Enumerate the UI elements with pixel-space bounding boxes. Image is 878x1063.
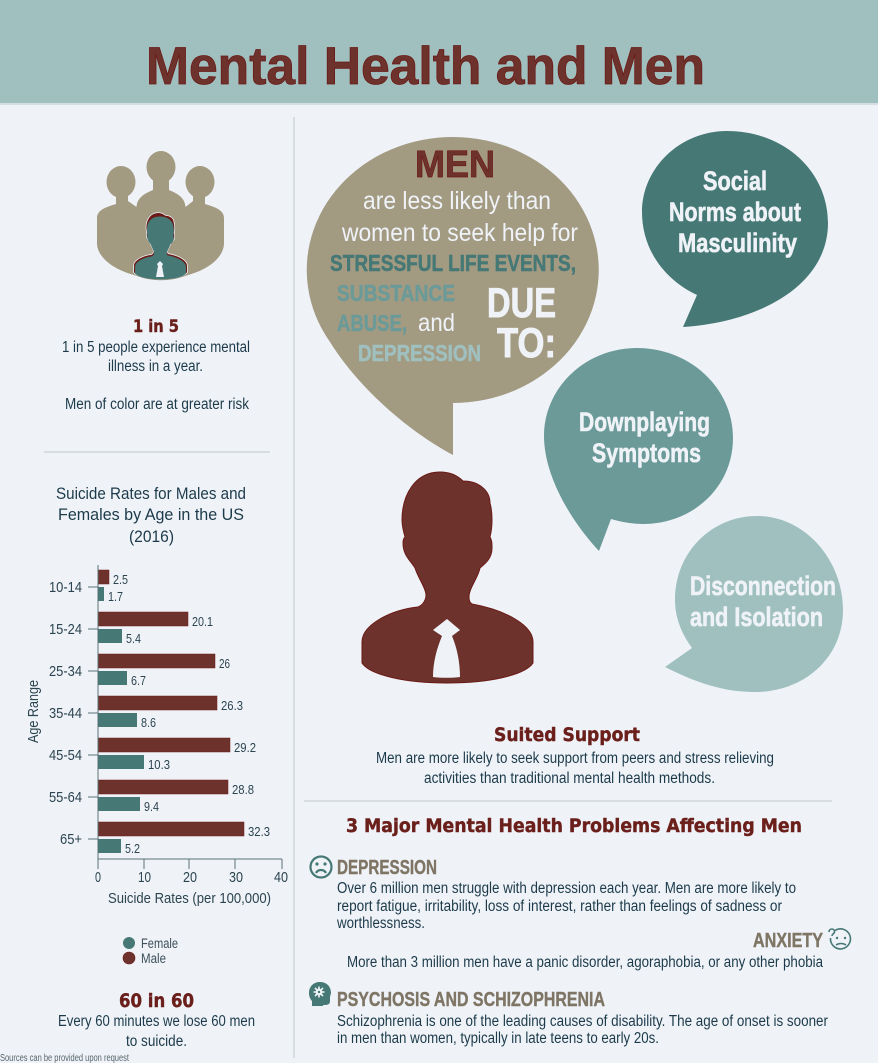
x axis labels: 40 — [274, 869, 288, 886]
title: Mental Health and Men — [146, 37, 705, 96]
age labels — [49, 579, 82, 848]
value labels: 2.5 — [113, 572, 128, 587]
icon: group of people with highlighted man — [97, 151, 224, 280]
chart title: Suicide Rates for Males and — [56, 484, 246, 503]
female bars — [98, 587, 144, 853]
stat: 1 in 5: Men of color are at greater risk — [65, 396, 249, 413]
block: depression: worthlessness. — [336, 915, 425, 932]
value labels: 5.2 — [125, 841, 140, 856]
block: psychosis and schizophrenia — [337, 989, 828, 1047]
value labels: 26 — [219, 656, 230, 671]
stat: 60 in 60: to suicide. — [126, 1033, 187, 1050]
y axis title: Age Range — [25, 680, 42, 743]
speech bubble: men less likely to seek help: and — [418, 309, 455, 337]
speech bubble: men less likely to seek help: ABUSE, — [337, 310, 407, 336]
icon: man silhouette with tie — [362, 472, 533, 683]
section: suited support: activities than traditional mental health methods. — [424, 770, 715, 787]
bar chart: suicide rates by age — [25, 565, 288, 907]
stat: 1 in 5: illness in a year. — [108, 358, 203, 375]
block: anxiety — [347, 930, 824, 971]
speech bubble: men less likely to seek help: STRESSFUL LIFE EVENTS, — [330, 250, 576, 276]
x axis labels: 30 — [229, 869, 243, 886]
speech bubble: social norms — [642, 131, 828, 327]
speech bubble: social norms: Social — [703, 166, 767, 196]
header banner — [0, 0, 878, 105]
stat: 60 in 60: 60 in 60 — [119, 990, 194, 1012]
speech bubble: social norms: Masculinity — [678, 228, 797, 258]
age labels: 15-24 — [49, 621, 82, 638]
section: suited support: Men are more likely to seek support from peers and stress relieving — [376, 750, 774, 767]
age labels: 45-54 — [49, 747, 82, 764]
block: depression — [336, 857, 796, 932]
speech bubble: men less likely to seek help: are less likely than — [363, 187, 551, 215]
speech bubble: men less likely to seek help: SUBSTANCE — [337, 280, 455, 306]
speech bubble: social norms: Norms about — [669, 197, 801, 227]
value labels: 1.7 — [108, 589, 123, 604]
chart title — [56, 484, 246, 546]
stat: 60 in 60: Every 60 minutes we lose 60 men — [58, 1013, 255, 1030]
speech bubble: disconnection and isolation: Disconnection — [690, 571, 836, 601]
age labels: 55-64 — [49, 789, 82, 806]
legend — [123, 936, 178, 966]
icon: anxious face — [829, 929, 850, 949]
stat: 1 in 5: 1 in 5 — [133, 317, 179, 337]
x axis labels: 10 — [138, 869, 151, 886]
value labels: 29.2 — [234, 740, 256, 755]
value labels: 6.7 — [131, 673, 146, 688]
speech bubble: downplaying symptoms: Symptoms — [592, 438, 701, 468]
section: suited support: Suited Support — [494, 724, 640, 746]
speech bubble: disconnection and isolation — [665, 516, 843, 692]
stat: 1 in 5: 1 in 5 people experience mental — [62, 339, 250, 356]
x axis labels: 20 — [183, 869, 197, 886]
x axis labels — [95, 869, 288, 886]
block: depression: report fatigue, irritability, loss of interest, rather than feelings of sadness or — [337, 898, 782, 915]
section: suited support — [376, 724, 774, 787]
speech bubble: men less likely to seek help: MEN — [415, 144, 495, 186]
speech bubble: disconnection and isolation: and Isolation — [690, 602, 823, 632]
value labels: 28.8 — [232, 782, 254, 797]
icon: sad face — [310, 856, 332, 878]
age labels: 25-34 — [49, 663, 82, 680]
value labels: 5.4 — [126, 631, 141, 646]
block: anxiety: ANXIETY — [753, 930, 824, 952]
speech bubble: downplaying symptoms — [544, 348, 733, 551]
value labels — [108, 572, 270, 856]
age labels: 10-14 — [49, 579, 82, 596]
icon: head with gear — [309, 982, 331, 1006]
speech bubble: downplaying symptoms: Downplaying — [579, 407, 710, 437]
heading: 3 major problems: 3 Major Mental Health Problems Affecting Men — [346, 815, 802, 837]
legend: Male — [141, 951, 166, 966]
speech bubble: men less likely to seek help: DEPRESSION — [358, 340, 481, 366]
block: psychosis and schizophrenia: PSYCHOSIS AND SCHIZOPHRENIA — [337, 989, 605, 1011]
age labels: 35-44 — [49, 705, 82, 722]
value labels: 8.6 — [141, 715, 156, 730]
value labels: 9.4 — [144, 799, 159, 814]
block: depression: DEPRESSION — [337, 857, 437, 879]
speech bubble: men less likely to seek help — [307, 137, 599, 455]
stat: 60 in 60 — [58, 990, 255, 1050]
chart title: Females by Age in the US — [58, 505, 244, 524]
speech bubble: men less likely to seek help: TO: — [497, 319, 556, 366]
value labels: 26.3 — [221, 698, 243, 713]
value labels: 10.3 — [148, 757, 170, 772]
speech bubble: men less likely to seek help: DUE — [487, 279, 556, 326]
legend: Female — [141, 936, 178, 951]
x axis title: Suicide Rates (per 100,000) — [108, 890, 271, 907]
speech bubble: men less likely to seek help: women to seek help for — [341, 219, 578, 247]
chart title: (2016) — [129, 527, 174, 546]
stat: 1 in 5 — [62, 317, 250, 413]
value labels: 32.3 — [248, 824, 270, 839]
age labels: 65+ — [60, 831, 82, 848]
block: psychosis and schizophrenia: in men than women, typically in late teens to early 20s. — [337, 1030, 659, 1047]
block: depression: Over 6 million men struggle with depression each year. Men are more likely to — [337, 880, 796, 897]
male bars — [98, 570, 244, 836]
value labels: 20.1 — [192, 614, 213, 629]
x axis labels: 0 — [95, 869, 101, 886]
